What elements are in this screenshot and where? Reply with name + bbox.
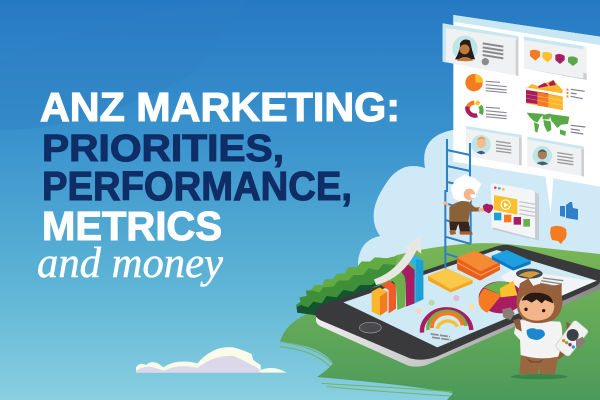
green hill bbox=[280, 243, 600, 400]
website window bbox=[491, 183, 539, 241]
small cloud bbox=[136, 347, 287, 373]
card: profile man right bbox=[527, 137, 584, 177]
title line: Performance: PERFORMANCE, bbox=[42, 163, 352, 209]
icon: thumbs up bbox=[560, 202, 578, 220]
heart bbox=[483, 204, 493, 213]
screen bbox=[343, 250, 597, 347]
large cloud bbox=[358, 129, 600, 300]
stacked area chart bbox=[526, 80, 585, 110]
card: profile man left bbox=[466, 126, 522, 166]
hedge bbox=[296, 256, 397, 315]
world map bbox=[527, 113, 585, 136]
title line: Metrics: METRICS bbox=[42, 203, 222, 249]
phone in hand bbox=[556, 321, 588, 356]
envelope: blue bbox=[492, 250, 531, 271]
bar chart bbox=[372, 255, 423, 316]
title bbox=[40, 84, 400, 249]
donut chart bbox=[467, 102, 507, 119]
envelope: orange bbox=[457, 251, 500, 281]
profile row on phone bbox=[516, 269, 563, 287]
title line: ANZ Marketing: ANZ MARKETING: bbox=[40, 84, 400, 130]
smartphone bbox=[315, 190, 600, 367]
Astro mascot bbox=[502, 278, 588, 379]
subtitle script: and money bbox=[37, 240, 224, 287]
card: reactions bbox=[524, 37, 587, 80]
envelope: yellow bbox=[428, 268, 473, 292]
dashboard panel bbox=[443, 15, 600, 213]
pie chart on phone bbox=[479, 281, 523, 313]
sky shading bbox=[0, 0, 250, 130]
arc chart on phone bbox=[416, 295, 474, 340]
ladder upper rail bbox=[447, 139, 470, 192]
growth arrow bbox=[374, 236, 421, 285]
title line: Priorities: PRIORITIES, bbox=[42, 128, 284, 170]
card: profile woman bbox=[443, 23, 518, 76]
pie chart bbox=[465, 74, 507, 93]
home button bbox=[359, 322, 381, 333]
icon: chat bubble bbox=[550, 226, 567, 244]
Einstein character bbox=[443, 174, 493, 235]
lake reflection bbox=[280, 342, 452, 396]
ladder bbox=[445, 190, 471, 268]
